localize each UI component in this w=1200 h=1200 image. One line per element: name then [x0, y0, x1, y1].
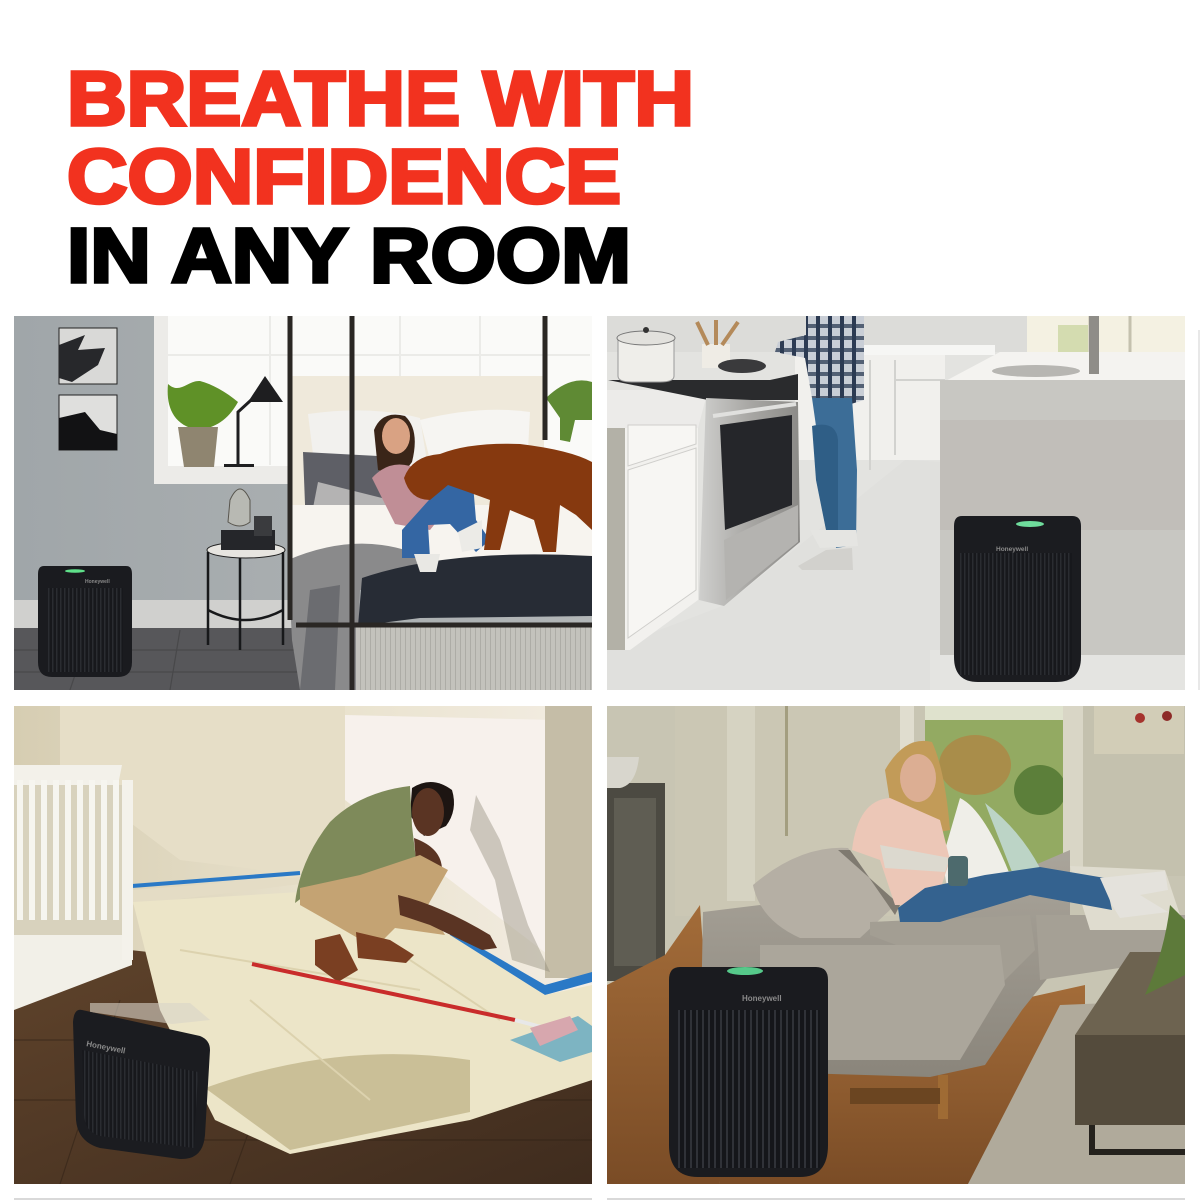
floor — [607, 460, 945, 690]
wall painting — [1094, 706, 1184, 754]
stove — [608, 374, 800, 606]
air purifier: Honeywell — [86, 1039, 126, 1056]
next row edge strips — [14, 330, 1200, 1200]
woman on sofa — [852, 741, 1168, 922]
back cabinets — [790, 345, 995, 470]
title line: breathe with: BREATHE WITH — [67, 56, 694, 142]
blue tape — [132, 873, 592, 995]
coffee table — [1075, 905, 1185, 1152]
drop cloth — [133, 892, 592, 1154]
nightstand — [207, 489, 285, 650]
window with garden — [925, 706, 1185, 876]
sunlight on wall — [60, 706, 345, 880]
floor and skirting — [14, 600, 314, 690]
air purifier: Honeywell — [996, 546, 1028, 553]
throw pillows and blanket — [942, 798, 1185, 930]
island — [938, 316, 1185, 655]
bedside plant — [546, 380, 592, 442]
person cooking — [775, 316, 864, 570]
pot and utensils — [617, 320, 766, 382]
panel: living room — [607, 706, 1185, 1184]
crib — [14, 765, 133, 1010]
left counter and cabinet — [607, 390, 708, 650]
cabinet with bowl — [607, 757, 665, 981]
man painting — [295, 782, 550, 982]
sofa — [700, 848, 1185, 1119]
bedroom window — [154, 316, 592, 484]
panel: bedroom — [14, 316, 592, 690]
pillows — [303, 410, 530, 534]
title — [67, 56, 694, 299]
floor — [14, 950, 592, 1184]
plant on windowsill — [168, 381, 238, 467]
air purifier — [38, 566, 132, 677]
panel: kitchen — [607, 316, 1185, 690]
air purifier: Honeywell — [742, 994, 782, 1003]
mattress and bedding — [288, 505, 592, 690]
air purifier — [669, 967, 828, 1177]
air purifier: Honeywell — [85, 579, 110, 585]
woman — [372, 415, 490, 572]
wood floor — [607, 905, 720, 1184]
title line: in any room: IN ANY ROOM — [67, 213, 631, 299]
paint roller — [252, 964, 592, 1062]
rug — [968, 1000, 1185, 1184]
air purifier — [954, 516, 1081, 682]
air purifier — [73, 1003, 210, 1159]
wall art — [59, 328, 117, 450]
dog — [404, 444, 592, 552]
panel: nursery — [14, 706, 592, 1184]
bed posts — [290, 316, 592, 690]
bed headboard — [292, 376, 544, 526]
title line: confidence: CONFIDENCE — [67, 134, 621, 220]
back wall — [675, 706, 914, 916]
desk lamp — [224, 376, 283, 467]
backsplash and window — [607, 316, 1185, 354]
